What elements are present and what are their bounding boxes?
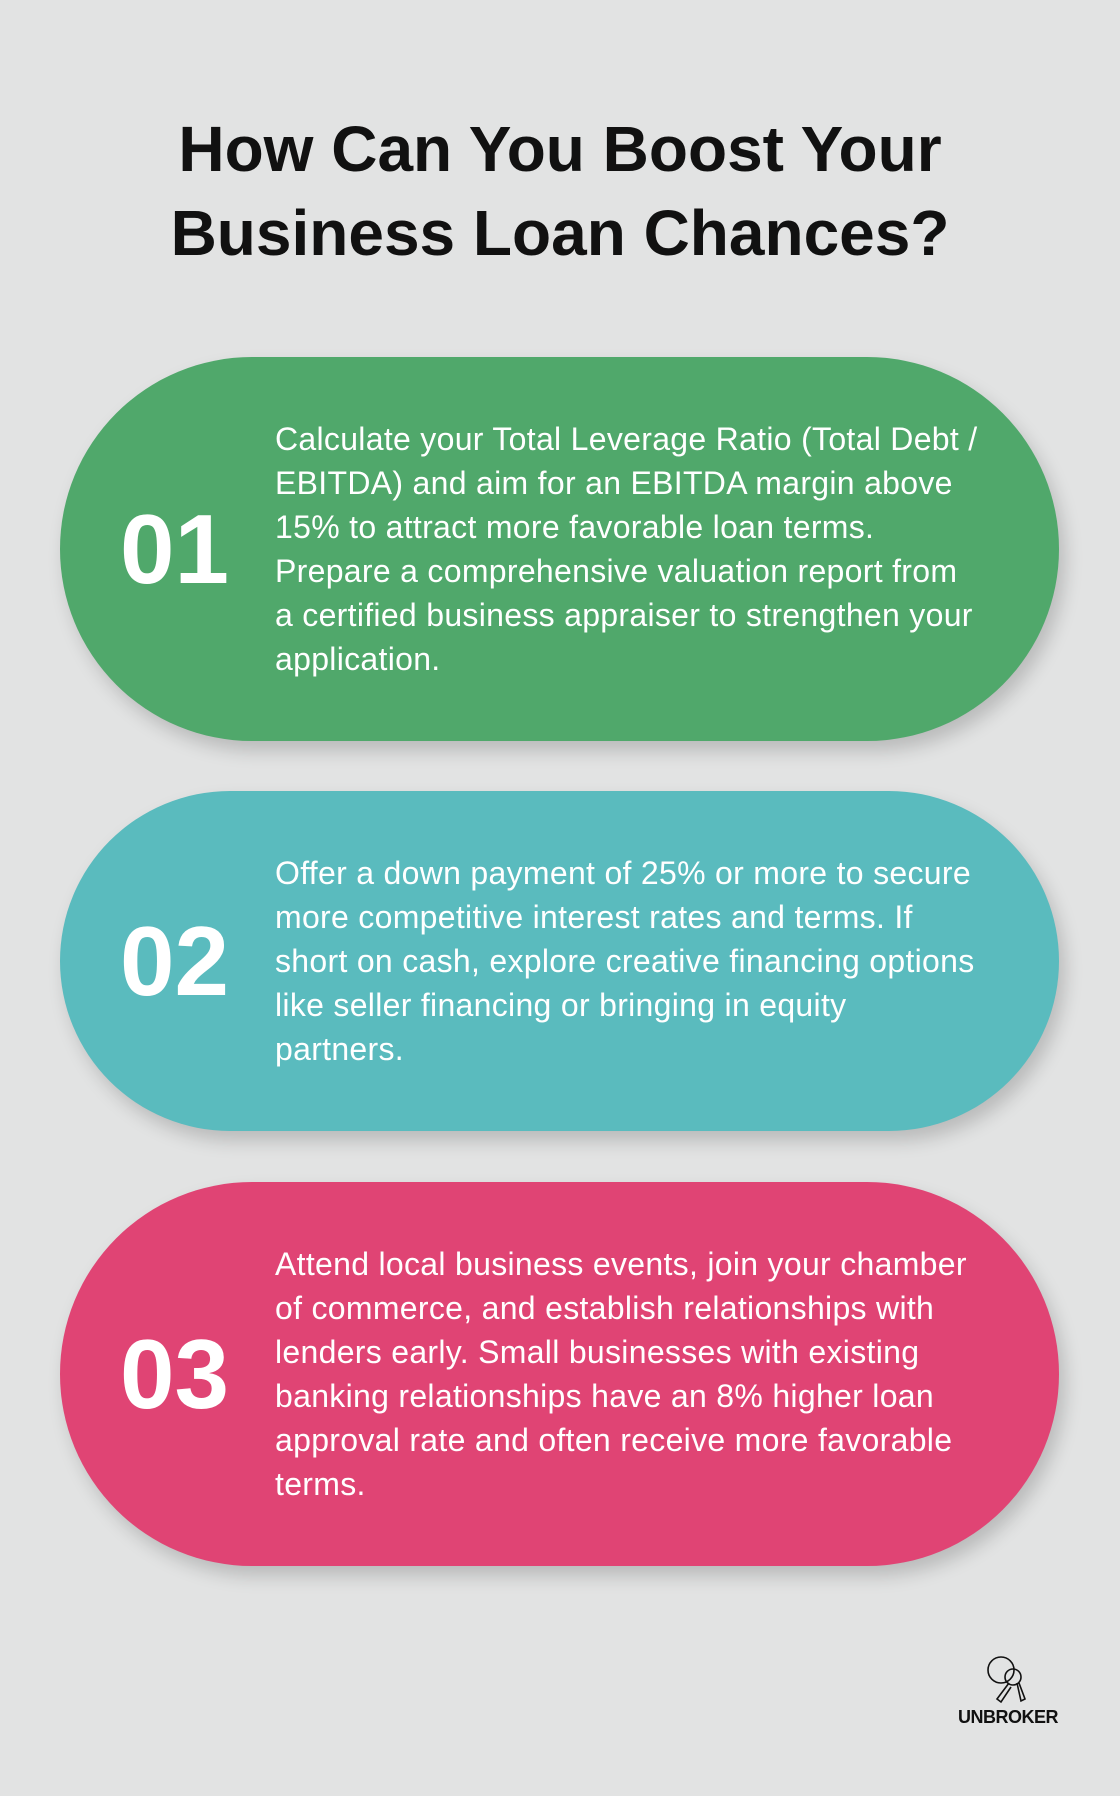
- title: Business Loan Chances?: [171, 197, 949, 269]
- text 03: of commerce, and establish relationships with: [275, 1290, 934, 1326]
- number 01: 01: [120, 494, 229, 604]
- text 01: EBITDA) and aim for an EBITDA margin above: [275, 465, 953, 501]
- text 02: more competitive interest rates and terms. If: [275, 899, 913, 935]
- panel: step 01: [60, 357, 1059, 741]
- text 02: short on cash, explore creative financing options: [275, 943, 975, 979]
- text 02: [275, 855, 975, 1067]
- text 03: lenders early. Small businesses with existing: [275, 1334, 919, 1370]
- text 01: application.: [275, 641, 440, 677]
- number 03: 03: [120, 1318, 229, 1428]
- text 02: like seller financing or bringing in equity: [275, 987, 846, 1023]
- text 01: [275, 421, 978, 677]
- icon: keys: [987, 1656, 1026, 1704]
- title: [171, 113, 949, 269]
- number 02: 02: [120, 906, 229, 1016]
- brand name: UNBROKER: [958, 1707, 1058, 1727]
- logo: [958, 1656, 1058, 1727]
- text 01: Calculate your Total Leverage Ratio (Total Debt /: [275, 421, 977, 457]
- text 02: Offer a down payment of 25% or more to secure: [275, 855, 971, 891]
- text 02: partners.: [275, 1031, 404, 1067]
- text 03: Attend local business events, join your chamber: [275, 1246, 967, 1282]
- text 01: Prepare a comprehensive valuation report from: [275, 553, 957, 589]
- text 03: terms.: [275, 1466, 366, 1502]
- text 03: [275, 1246, 967, 1502]
- text 01: a certified business appraiser to strengthen your: [275, 597, 973, 633]
- text 03: approval rate and often receive more favorable: [275, 1422, 952, 1458]
- text 01: 15% to attract more favorable loan terms.: [275, 509, 874, 545]
- title: How Can You Boost Your: [178, 113, 942, 185]
- panel: step 02: [60, 791, 1059, 1131]
- text 03: banking relationships have an 8% higher loan: [275, 1378, 934, 1414]
- panel: step 03: [60, 1182, 1059, 1566]
